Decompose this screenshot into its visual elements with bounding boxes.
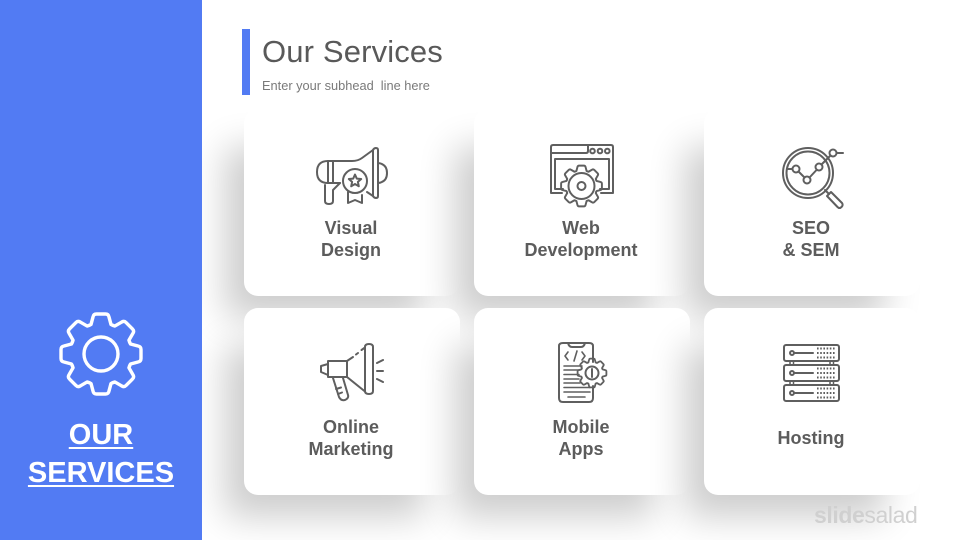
label: Online Marketing <box>308 417 394 459</box>
card: SEO & SEM <box>704 109 920 296</box>
label: Mobile Apps: Mobile <box>552 417 610 437</box>
label: Mobile Apps <box>552 417 610 459</box>
card: Visual Design <box>244 109 460 296</box>
sidebar panel <box>0 0 202 540</box>
sidebar heading: SERVICES <box>28 456 174 488</box>
label: SEO & SEM <box>782 218 840 260</box>
label: Online Marketing: Online <box>323 417 379 437</box>
icon: megaphone <box>320 343 384 402</box>
title: Our Services <box>262 34 443 69</box>
label: Hosting: Hosting <box>778 428 844 448</box>
label: SEO & SEM: SEO <box>792 218 830 238</box>
accent bar <box>242 29 250 95</box>
icon: magnifier with line chart <box>782 147 844 209</box>
subhead: Enter your subhead line here <box>262 78 430 93</box>
icon: white gear <box>59 312 143 396</box>
label: Visual Design: Design <box>321 240 381 260</box>
label: Mobile Apps: Apps <box>558 439 604 459</box>
card: Web Development <box>474 109 690 296</box>
label: Web Development <box>524 218 638 260</box>
label: SEO & SEM: & SEM <box>782 240 840 260</box>
card: Mobile Apps <box>474 308 690 495</box>
icon: browser window with gear <box>550 144 614 208</box>
label: Online Marketing: Marketing <box>308 439 394 459</box>
watermark: slidesalad <box>814 502 917 528</box>
label: Web Development: Development <box>524 240 638 260</box>
sidebar heading: OUR <box>69 419 133 451</box>
icon: server rack <box>783 344 840 402</box>
icon: megaphone with award badge <box>316 147 388 205</box>
card: Hosting <box>704 308 920 495</box>
label: Web Development: Web <box>562 218 600 238</box>
card: Online Marketing <box>244 308 460 495</box>
icon: smartphone with code and gear <box>558 342 608 403</box>
label: Visual Design <box>321 218 381 260</box>
sidebar heading <box>28 419 174 488</box>
label: Visual Design: Visual <box>325 218 377 238</box>
